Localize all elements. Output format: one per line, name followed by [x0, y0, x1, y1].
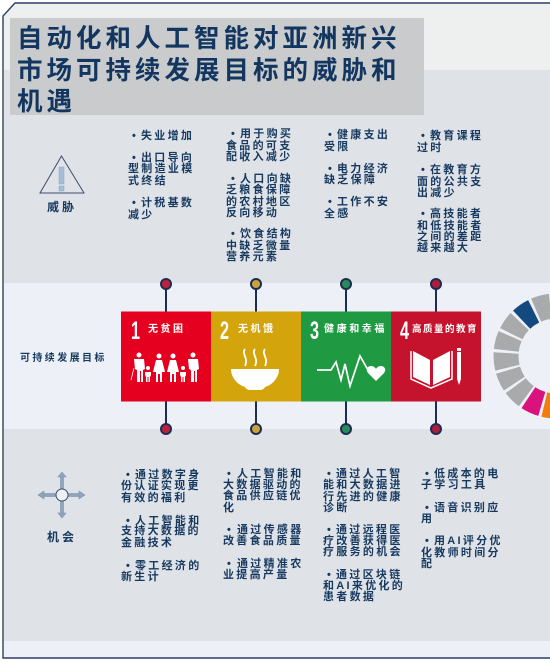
opportunities column: health: 疗改善获得医: [323, 533, 403, 547]
threats column: hunger: 乏粮食保障: [226, 182, 292, 196]
threats column: hunger: 饮食结构: [240, 226, 293, 240]
opportunities column: health: 通过远程医: [336, 522, 402, 536]
title: [10, 18, 424, 116]
opportunities column: poverty: 有效的福利: [121, 490, 188, 504]
goal 3: good health: 3: [310, 318, 319, 345]
opportunities column: hunger: •: [227, 468, 233, 480]
opportunities column: health: 行先进的健康: [323, 489, 403, 503]
threats column: hunger: •: [231, 228, 237, 240]
threats column: poverty: •: [132, 130, 138, 142]
opportunities column: education: 语音识别应: [434, 500, 500, 514]
opportunities column: hunger: 通过精准农: [237, 556, 304, 570]
icon: family: [131, 352, 199, 382]
threats column: hunger: 的农村地区: [226, 194, 292, 208]
icon: four-way arrows: [38, 472, 85, 518]
threats label: 威胁: [47, 199, 77, 214]
opportunities column: hunger: 人工智能和: [237, 466, 304, 480]
threats column: poverty: 减少: [128, 208, 155, 221]
opportunities column: health: 能和大数据进: [323, 477, 403, 491]
opportunities column: education: 用AI评分优: [434, 533, 503, 547]
threats column: hunger: [226, 126, 293, 263]
title: 自动化和人工智能对亚洲新兴: [17, 25, 401, 53]
threats column: hunger: •: [231, 173, 237, 185]
opportunities column: education: 子学习工具: [421, 477, 488, 491]
opportunities column: health: 患者数据: [323, 589, 376, 603]
opportunities column: education: 用: [421, 512, 434, 525]
threats column: poverty: 失业增加: [141, 128, 194, 142]
threats column: health: •: [328, 196, 334, 208]
threats column: hunger: 配收入减少: [226, 149, 292, 163]
threats column: education: •: [421, 130, 427, 142]
threats column: education: 教育课程: [430, 128, 483, 142]
threats column: education: 面的公共支: [417, 174, 484, 188]
goal 1: no poverty: 无贫困: [148, 322, 186, 335]
threats column: health: 工作不安: [337, 194, 390, 208]
opportunities column: poverty: 支持大数据的: [121, 523, 201, 537]
opportunities column: hunger: •: [227, 558, 233, 570]
threats column: hunger: 用于购买: [240, 126, 293, 140]
opportunities column: health: 通过人工智: [336, 466, 402, 480]
goal 2: zero hunger: 2: [220, 318, 229, 345]
opportunities column: health: 和AI来优化的: [323, 578, 405, 592]
title: 机遇: [17, 88, 76, 116]
opportunities column: poverty: 新生计: [121, 569, 161, 583]
threats column: health: 缺乏保障: [324, 172, 377, 186]
opportunities column: education: 化教师时间分: [421, 545, 501, 559]
sustainable development goals label: 可持续发展目标: [20, 351, 107, 364]
threats column: health: 电力经济: [337, 161, 390, 175]
opportunities column: education: •: [425, 468, 431, 480]
opportunities column: education: 低成本的电: [434, 466, 500, 480]
goal 2: zero hunger: 无机饿: [238, 322, 276, 335]
opportunities column: hunger: 化: [223, 500, 236, 514]
threats column: education: 越来越大: [417, 240, 470, 254]
panel: threats: [40, 126, 484, 263]
opportunities column: poverty: 零工经济的: [135, 558, 202, 572]
threats column: education: 过时: [417, 140, 444, 154]
opportunities column: health: 诊断: [323, 500, 350, 514]
opportunities column: health: •: [327, 569, 333, 581]
SDG colour wheel: [506, 306, 550, 406]
title: 市场可持续发展目标的威胁和: [17, 57, 401, 85]
opportunities column: education: •: [425, 502, 431, 514]
opportunities column: education: •: [425, 535, 431, 547]
opportunities column: health: 疗服务的机会: [323, 544, 403, 558]
threats column: poverty: 型制造业模: [128, 161, 194, 175]
opportunities column: health: [323, 466, 405, 603]
threats column: education: [417, 128, 484, 254]
goal 3: good health: [301, 312, 391, 402]
opportunities column: hunger: 大数据驱动的: [223, 477, 303, 491]
threats column: poverty: 计税基数: [141, 195, 194, 209]
opportunities column: hunger: 食品供应链优: [223, 488, 303, 502]
opportunities column: hunger: [223, 466, 304, 581]
threats column: hunger: 人口向缺: [240, 171, 293, 185]
threats column: poverty: 出口导向: [141, 150, 194, 164]
threats column: education: •: [421, 164, 427, 176]
threats column: health: [324, 127, 390, 220]
icon: heartbeat: [317, 356, 385, 386]
opportunities column: health: 通过区块链: [336, 567, 402, 581]
threats column: education: 出减少: [417, 185, 457, 199]
opportunities column: health: •: [327, 524, 333, 536]
goal 1: no poverty: [121, 312, 211, 402]
threats column: education: 之间的差距: [417, 229, 484, 243]
connectors and dots: [161, 279, 441, 434]
threats column: education: 高技能者: [430, 206, 483, 220]
opportunities column: poverty: 份认证实现更: [121, 478, 201, 492]
opportunities column: poverty: •: [126, 515, 132, 527]
threats column: health: 健康支出: [337, 127, 390, 141]
opportunities label: 机会: [47, 529, 77, 544]
opportunities column: hunger: •: [227, 524, 233, 536]
panel: opportunities: [38, 466, 503, 603]
icon: warning triangle: [40, 156, 84, 193]
opportunities column: hunger: 业提高产量: [223, 567, 290, 581]
icon: bowl: [231, 349, 279, 390]
threats column: hunger: 中缺乏微量: [226, 238, 292, 252]
threats column: hunger: •: [231, 128, 237, 140]
opportunities column: poverty: •: [126, 469, 132, 481]
goal 4: quality education: 4: [400, 318, 409, 345]
threats column: health: •: [328, 129, 334, 141]
opportunities column: poverty: •: [126, 560, 132, 572]
goal 4: quality education: 高质量的教育: [412, 323, 478, 335]
goal 3: good health: 健康和幸福: [324, 322, 387, 335]
opportunities column: hunger: 通过传感器: [237, 522, 304, 536]
opportunities column: poverty: [121, 467, 202, 583]
opportunities column: education: 配: [421, 557, 434, 570]
threats column: health: •: [328, 163, 334, 175]
threats column: hunger: 营养元素: [226, 249, 279, 263]
opportunities column: health: •: [327, 468, 333, 480]
opportunities column: education: [421, 466, 503, 570]
goal 2: zero hunger: [211, 312, 301, 402]
threats column: hunger: 反向移动: [226, 205, 279, 219]
icon: open book and pencil: [411, 348, 461, 388]
threats column: education: 和低技能者: [417, 218, 484, 232]
goal 4: quality education: [391, 312, 481, 402]
threats column: hunger: 食品的可支: [226, 138, 292, 152]
opportunities column: hunger: 改善食品质量: [223, 533, 303, 547]
threats column: poverty: 式终结: [128, 173, 168, 187]
threats column: poverty: •: [132, 152, 138, 164]
threats column: health: 受限: [324, 139, 351, 153]
opportunities column: poverty: 通过数字身: [135, 467, 202, 481]
threats column: poverty: •: [132, 197, 138, 209]
opportunities column: poverty: 金融技术: [121, 535, 174, 549]
threats column: poverty: [128, 128, 194, 221]
opportunities column: poverty: 人工智能和: [135, 513, 202, 527]
threats column: health: 全感: [324, 206, 351, 220]
threats column: education: •: [421, 208, 427, 220]
threats column: education: 在教育方: [430, 162, 483, 176]
goal 1: no poverty: 1: [131, 318, 140, 345]
